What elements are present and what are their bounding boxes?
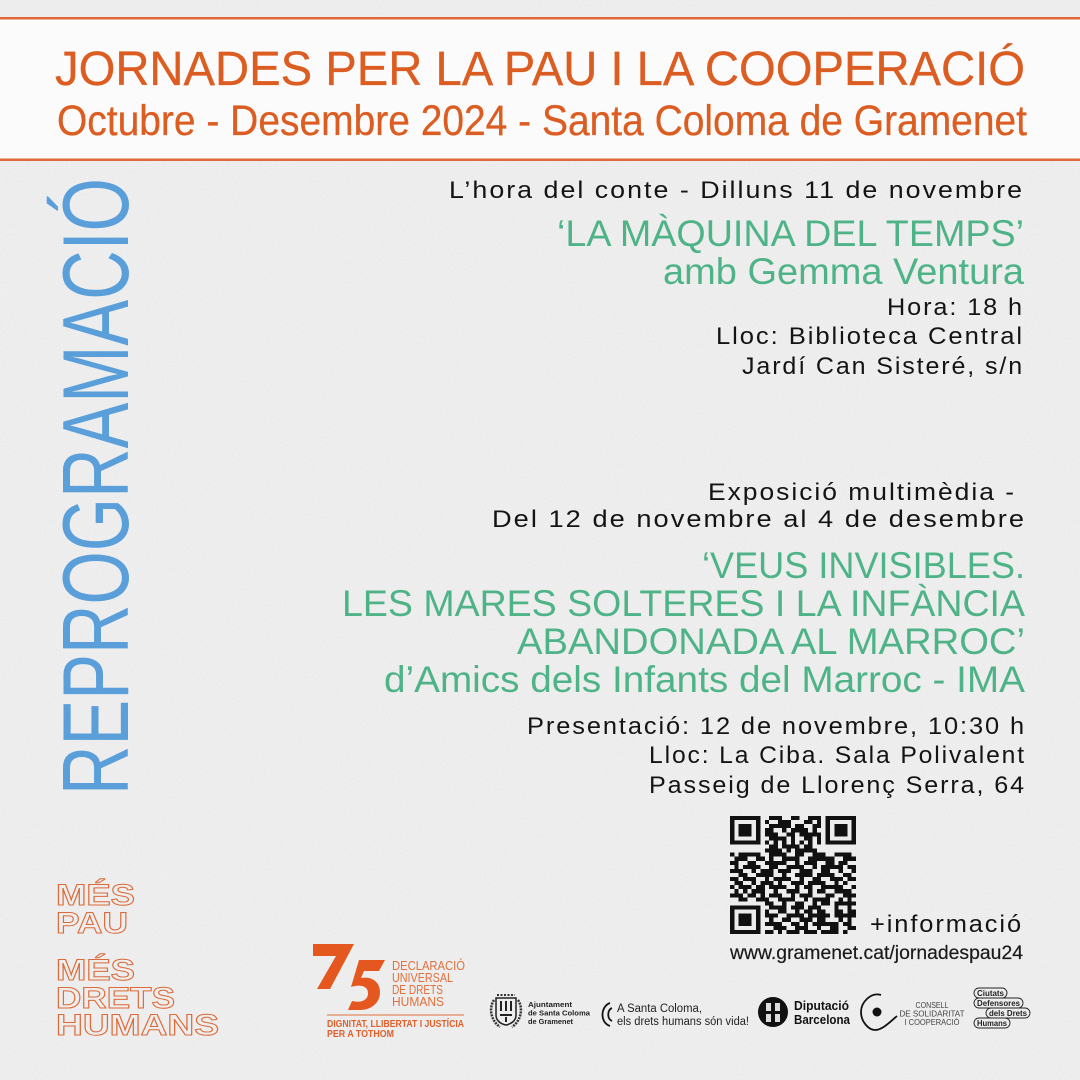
campaign text	[617, 1003, 749, 1028]
more information link: +informació	[870, 911, 1023, 938]
event details: Jardí Can Sisteré, s/n	[742, 353, 1024, 380]
event date: L’hora del conte - Dilluns 11 de novembre	[449, 177, 1024, 204]
bubble labels: dels Drets	[989, 1009, 1028, 1018]
exhibition author: d’Amics dels Infants del Marroc - IMA	[384, 659, 1025, 700]
exhibition date: Del 12 de novembre al 4 de desembre	[492, 506, 1026, 533]
event title: ‘LA MÀQUINA DEL TEMPS’	[557, 213, 1024, 254]
exhibition details	[527, 713, 1026, 799]
exhibition title: LES MARES SOLTERES I LA INFÀNCIA	[342, 583, 1025, 624]
event details: Hora: 18 h	[887, 294, 1024, 321]
declaration name: HUMANS	[392, 994, 444, 1009]
diputació name	[794, 999, 851, 1027]
slogan: més pau, més drets humans: DRETS	[56, 982, 175, 1015]
icon: double c	[602, 1003, 612, 1026]
declaration motto: DIGNITAT, LLIBERTAT I JUSTÍCIA	[327, 1017, 464, 1030]
slogan: més pau, més drets humans: MÉS	[56, 878, 135, 912]
exhibition title: ABANDONADA AL MARROC’	[517, 621, 1025, 662]
event author: amb Gemma Ventura	[663, 251, 1024, 292]
logo: 75 declaració universal de drets humans	[313, 944, 465, 1040]
event details	[716, 294, 1024, 380]
more information link	[729, 911, 1023, 964]
campaign text: els drets humans són vida!	[617, 1016, 749, 1028]
logo: consell de solidaritat i cooperació	[861, 994, 965, 1030]
exhibition details: Presentació: 12 de novembre, 10:30 h	[527, 713, 1026, 740]
council text: DE SOLIDARITAT	[900, 1010, 965, 1018]
exhibition date	[492, 479, 1026, 533]
council name: Ajuntament	[528, 1000, 573, 1009]
exhibition title: ‘VEUS INVISIBLES.	[702, 545, 1025, 586]
exhibition details: Lloc: La Ciba. Sala Polivalent	[649, 742, 1026, 769]
event block: veus invisibles	[342, 479, 1026, 799]
slogan: més pau, més drets humans: MÉS	[56, 953, 135, 987]
icon: coat of arms	[491, 995, 521, 1027]
council name: de Santa Coloma	[528, 1008, 591, 1018]
qr code	[730, 816, 856, 934]
bubble labels	[977, 989, 1028, 1028]
bubble labels: Humans	[977, 1019, 1008, 1028]
declaration name	[392, 958, 465, 1009]
more information link: www.gramenet.cat/jornadespau24	[729, 942, 1023, 964]
exhibition date: Exposició multimèdia -	[708, 479, 1016, 506]
declaration motto	[327, 1017, 464, 1040]
declaration name: DE DRETS	[392, 982, 443, 997]
exhibition title	[342, 545, 1025, 662]
event details: Lloc: Biblioteca Central	[716, 323, 1024, 350]
logo: diputació barcelona	[758, 997, 851, 1027]
council name	[528, 1000, 591, 1026]
title	[55, 42, 1027, 145]
logo: a santa coloma, els drets humans són vida	[602, 1003, 749, 1028]
council text: I COOPERACIÓ	[904, 1018, 960, 1027]
diputació name: Barcelona	[794, 1013, 851, 1027]
declaration name: DECLARACIÓ	[392, 958, 465, 973]
slogan: més pau, més drets humans: PAU	[56, 907, 128, 940]
slogan: més pau, més drets humans: HUMANS	[56, 1009, 219, 1042]
icon: number 75	[313, 944, 385, 1010]
exhibition details: Passeig de Llorenç Serra, 64	[649, 772, 1026, 799]
bubble labels: Ciutats	[977, 989, 1005, 998]
declaration name: UNIVERSAL	[392, 970, 453, 985]
title line 1: JORNADES PER LA PAU I LA COOPERACIÓ	[55, 42, 1025, 96]
declaration motto: PER A TOTHOM	[327, 1028, 394, 1040]
bubble labels: Defensores	[977, 999, 1021, 1008]
diputació name: Diputació	[794, 999, 849, 1013]
council name: de Gramenet	[528, 1017, 573, 1026]
slogan: més pau, més drets humans	[56, 878, 219, 1042]
campaign text: A Santa Coloma,	[617, 1003, 702, 1015]
icon: circle and dot	[861, 994, 897, 1030]
logo: ciutats defensores dels drets humans	[974, 988, 1030, 1028]
icon: diputació seal	[758, 997, 788, 1027]
council text: CONSELL	[916, 1001, 949, 1010]
logo: ajuntament de santa coloma	[491, 995, 591, 1027]
council text	[900, 1001, 965, 1027]
event block: la màquina del temps	[449, 177, 1024, 380]
speech bubbles	[974, 988, 1030, 1028]
